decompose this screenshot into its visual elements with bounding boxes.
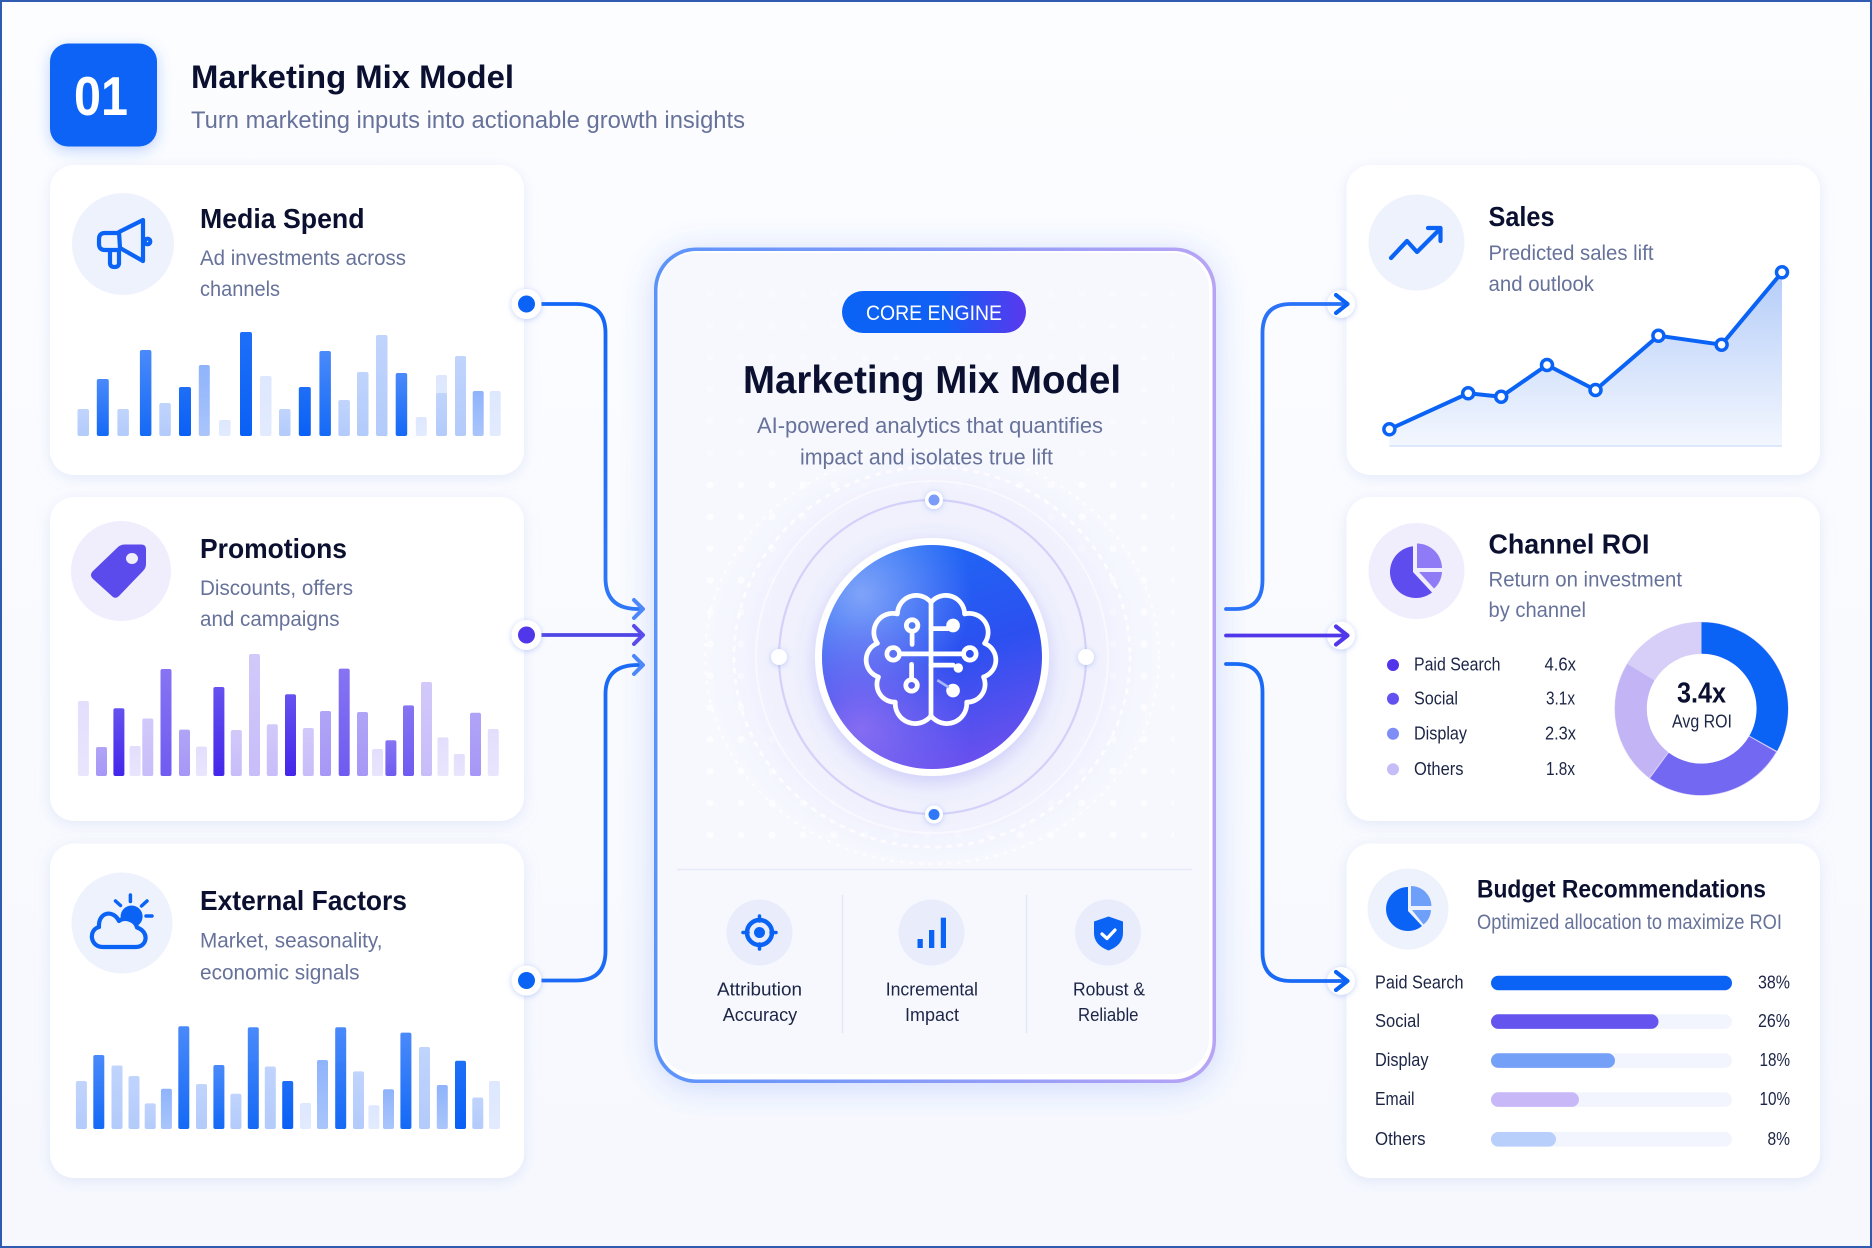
feature: attribution accuracy: Accuracy [723,1004,798,1025]
arrow: engine to channel ROI [1226,622,1355,650]
description: Discounts, offers [200,577,353,600]
description: and outlook [1488,273,1594,296]
description: Predicted sales lift [1488,242,1654,265]
bar rows: 18% [1760,1050,1790,1070]
legend [1387,654,1576,779]
description: channels [200,278,280,301]
panel: sales [1346,165,1820,475]
description: Return on investment [1488,568,1682,592]
bar chart [76,1026,500,1129]
connector node: promotions [512,620,542,650]
arrow: external factors to engine [542,656,643,980]
bar rows: 38% [1758,972,1790,992]
donut centre value: 3.4x [1677,678,1726,710]
bar rows: 8% [1768,1129,1790,1149]
panel: promotions [50,497,524,821]
heading: Channel ROI [1488,528,1650,560]
bar rows: Display [1375,1050,1428,1070]
feature: incremental impact: Incremental [886,978,978,1000]
heading: Budget Recommendations [1477,876,1766,904]
legend: Display [1414,724,1467,744]
legend: Others [1414,759,1464,779]
divider [677,868,1192,870]
feature: attribution accuracy: Attribution [717,978,802,1000]
description [1488,568,1682,622]
feature: attribution accuracy [717,900,802,1025]
feature: robust and reliable: Reliable [1078,1004,1138,1025]
description: Ad investments across [200,247,406,270]
panel: external factors [50,844,524,1178]
icon: pie chart [1368,868,1448,950]
bar chart [78,332,501,436]
description: and campaigns [200,608,340,631]
number badge: 01 [74,65,128,127]
feature: robust and reliable [1073,900,1146,1025]
icon: pie chart [1368,523,1464,619]
line chart [1384,267,1788,446]
icon: megaphone [72,193,174,295]
bar rows [1375,972,1790,1149]
description: Optimized allocation to maximize ROI [1477,911,1782,934]
heading: Media Spend [200,203,364,234]
number badge [50,44,157,146]
panel: channel ROI [1346,497,1820,821]
description: Market, seasonality, [200,930,382,952]
feature: incremental impact [886,900,978,1025]
heading: Sales [1488,201,1554,232]
arrow: promotions to engine [542,626,643,644]
description [200,577,353,631]
icon: tag [71,521,171,621]
page title: Marketing Mix Model [191,59,514,95]
description [200,247,406,301]
heading: Promotions [200,533,347,564]
header [50,44,745,146]
description: by channel [1488,599,1586,622]
legend: 3.1x [1546,688,1575,708]
donut centre label: Avg ROI [1672,712,1732,732]
pill label: CORE ENGINE [866,302,1002,325]
icon: trend arrow [1368,194,1464,290]
pill label [842,291,1026,333]
description: economic signals [200,962,360,984]
orbit nodes [771,491,1094,824]
legend: 4.6x [1544,654,1576,674]
feature: robust and reliable: Robust & [1073,978,1146,1000]
bar rows: Social [1375,1011,1420,1031]
arrow: engine to sales [1226,290,1355,609]
icon: brain in gradient circle [815,538,1049,776]
heading: External Factors [200,885,407,916]
orbit rings [705,450,1159,864]
description: impact and isolates true lift [800,444,1053,470]
description [757,413,1103,470]
bar rows: Paid Search [1375,972,1464,992]
legend: 1.8x [1546,759,1575,779]
legend: Paid Search [1414,654,1500,674]
arrow: media spend to engine [542,304,643,618]
page subtitle: Turn marketing inputs into actionable growth insights [191,107,745,134]
bar rows: 10% [1760,1089,1790,1109]
bar chart [78,654,499,776]
panel: core engine [654,248,1216,1083]
feature: incremental impact: Impact [905,1004,959,1025]
description [1488,242,1654,296]
panel: budget recommendations [1346,844,1820,1178]
description: AI-powered analytics that quantifies [757,413,1103,438]
donut chart [1615,622,1788,795]
arrow: engine to budget recommendations [1226,664,1355,995]
connector node: external factors [512,966,542,996]
panel: media spend [50,165,524,475]
bar rows: Others [1375,1129,1426,1149]
bar rows: Email [1375,1089,1414,1109]
legend: Social [1414,688,1458,708]
bar rows: 26% [1758,1011,1790,1031]
heading: Marketing Mix Model [743,359,1121,402]
description [200,930,382,984]
connector node: media spend [512,289,542,319]
legend: 2.3x [1545,724,1576,744]
icon: cloud and sun [72,872,172,974]
